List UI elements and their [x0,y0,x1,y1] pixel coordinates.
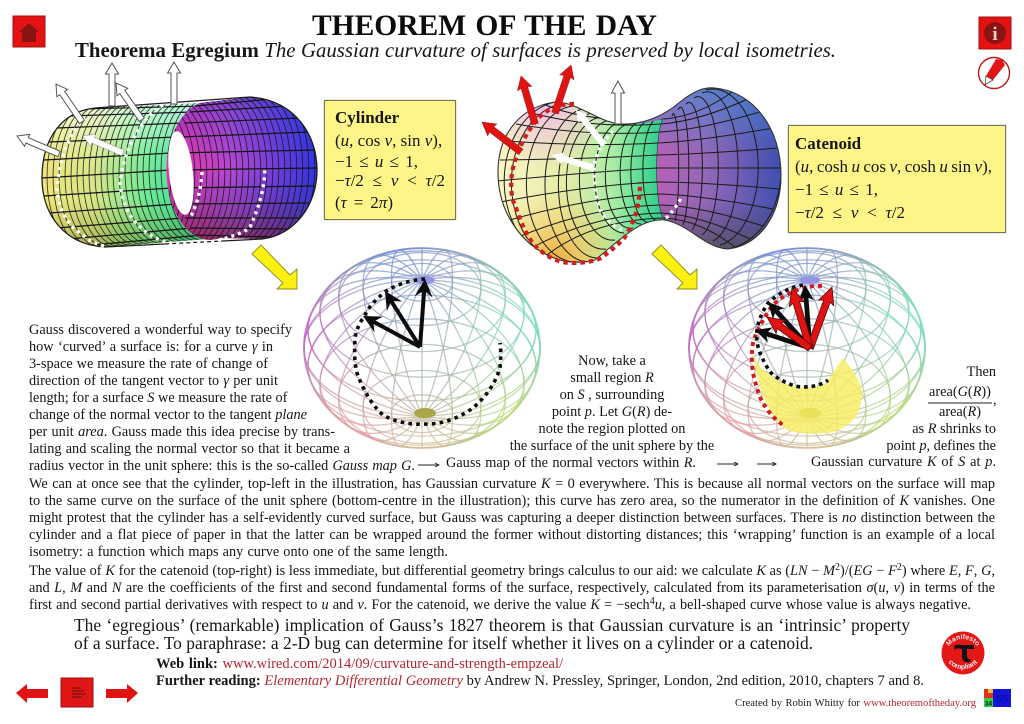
text block: Gauss curvature introduction: direction of the tangent vector to γ per unit [29,372,278,388]
red dotted curve on catenoid [511,104,640,263]
panel: cylinder definition: −1 ≤ u ≤ 1, [335,152,418,171]
text block: web link and further reading: Further reading: Elementary Differential Geometry by Andrew N. Pressley, Springer, London, 2nd edition, 2010, chapters 7 and 8. [156,673,924,689]
text block: cylinder explanation: cylinder and a flat piece of paper in that the latter can be wrapped around the former without distorting distances; this ‘wrapping’ function is an example of a local [29,526,995,542]
text block: small region R: Now, take a [578,353,646,369]
yellow region on sphere [752,350,862,434]
catenoid silhouette outline [498,88,781,262]
text block: implication of the theorem: The ‘egregious’ (remarkable) implication of Gauss’s 1827 theorem is that Gaussian curvature is an ‘intrinsic’ property [74,614,910,634]
cylinder silhouette outline [42,97,317,247]
icon: information button [979,17,1011,49]
black radius vectors on sphere [359,278,434,355]
panel: catenoid definition: (u, cosh u cos v, cosh u sin v), [795,157,992,176]
text block: implication of the theorem [74,614,910,653]
text block: cylinder explanation [29,476,995,560]
text block: Gauss curvature introduction: how ‘curved’ a surface is: for a curve γ in [29,338,273,354]
badge: Manifesto compliant tau: compliant [949,660,978,671]
text block: catenoid explanation: The value of K for the catenoid (top-right) is less immediate, but differential geometry brings calculus to our aid: we calculate K as (LN − M2)/(EG − F2) where E, F, G, [29,562,995,578]
panel: cylinder definition: (u, cos v, sin v), [335,131,442,150]
text block: catenoid explanation [29,562,995,612]
white dotted curves on catenoid [594,131,682,230]
badge: theorem number blocks: 55 [996,694,1008,705]
panel: catenoid definition: Catenoid [795,134,861,153]
badge: theorem number blocks [984,689,1011,708]
text block: Gauss curvature introduction: length; for a surface S we measure the rate of [29,390,287,406]
black radius vectors on second sphere [753,284,818,356]
badge: theorem number blocks: 34 [985,700,992,708]
text block: implication of the theorem: of a surface. To paraphrase: a 2-D bug can determine for itself whether it lives on a cylinder or a catenoid. [74,632,813,652]
text block: cylinder explanation: to the same curve on the surface of the unit sphere (bottom-centre in the illustration); this curve has zero area, so the numerator in the definition of K vanishes. One [29,492,995,508]
fraction bar [928,402,992,404]
red radius vectors on second sphere [762,284,840,354]
icon: pencil in circle [978,58,1010,88]
credit line: Created by Robin Whitty for www.theoremoftheday.org [735,698,976,709]
text block: Gauss curvature introduction: lating and scaling the normal vector so that it became a [29,440,350,456]
text block: curvature definition [811,364,997,470]
text block: Gauss curvature introduction: per unit area. Gauss made this idea precise by trans- [29,424,335,440]
text block: small region R: point p. Let G(R) de- [552,404,672,420]
text block: Gauss curvature introduction: Gauss discovered a wonderful way to specify [29,322,292,338]
panel: cylinder definition [324,100,456,220]
text block: small region R: on S , surrounding [560,387,664,403]
text block: curvature definition: area(G(R)) [929,384,991,400]
text block: small region R: the surface of the unit sphere by the [510,438,714,454]
white normal vector arrows on cylinder [14,62,181,160]
text block: cylinder explanation: might protest that the cylinder has a self-evidently curved surface, but Gauss was capturing a deeper distinction between surfaces. There is no distinction between the [29,510,995,526]
cylinder inner surface [166,98,316,240]
black dotted curve on second sphere [757,285,828,387]
text block: catenoid explanation: first and second partial derivatives with respect to u and v. For the catenoid, we derive the value K = −sech4u, a bell-shaped curve whose value is always negative. [29,596,971,612]
text block: web link and further reading [156,656,924,689]
black dotted curve on sphere [355,279,501,424]
title: THEOREM OF THE DAY [312,10,657,42]
text block: curvature definition: point p, defines the [886,438,996,454]
catenoid interior surface [634,88,780,248]
yellow arrow to first sphere [252,245,297,289]
unit sphere: Gauss map of catenoid [675,235,940,460]
inline arrows between text passages [418,462,776,467]
panel: cylinder definition: Cylinder [335,108,399,127]
text block: curvature definition: area(R) [939,404,981,420]
text block: small region R: small region R [570,370,654,386]
text block: Gauss curvature introduction [29,322,415,474]
button: previous theorem arrow [16,684,48,703]
illustration: catenoid surface with normal vectors [477,63,781,263]
panel: cylinder definition: (τ = 2π) [335,193,393,212]
text block: curvature definition: Gaussian curvature K of S at p. [811,454,996,470]
text block: cylinder explanation: isometry: a function which maps any curve onto one of the same length. [29,544,448,560]
button: next theorem arrow [106,684,138,703]
text block: catenoid explanation: and L, M and N are the coefficients of the first and second fundamental forms of the surface, respectively, calculated from its parameterisation σ(u, v) in terms of the [29,580,995,596]
subtitle: theorem statement: Theorema Egregium The Gaussian curvature of surfaces is preserved by local isometries. [75,39,836,62]
yellow arrow to second sphere [652,245,697,289]
cylinder hole [165,130,197,216]
text block: curvature definition: as R shrinks to [912,421,996,437]
text block: Gauss curvature introduction: radius vector in the unit sphere: this is the so-called Gauss map G. [29,458,415,474]
white normal vector arrows on catenoid [550,81,624,174]
panel: cylinder definition: −τ/2 ≤ v < τ/2 [335,171,445,190]
badge: Manifesto compliant tau [942,632,984,674]
catenoid outer surface [498,102,668,262]
red dotted curve on sphere [752,286,822,425]
text block: cylinder explanation: We can at once see that the cylinder, top-left in the illustration, has Gaussian curvature K = 0 everywhere. This is because all normal vectors on the surface will map [29,476,995,492]
text block: small region R: Gauss map of the normal vectors within R. [446,455,696,471]
panel: catenoid definition: −τ/2 ≤ v < τ/2 [795,203,905,222]
icon: information button: i [992,24,998,45]
badge: Manifesto compliant tau: Manifesto [946,634,979,646]
text block: curvature definition: Then [967,364,996,380]
text block: small region R [446,353,714,471]
unit sphere: Gauss map of cylinder [290,235,555,460]
panel: catenoid definition [788,125,1006,233]
red normal vector arrows [477,63,578,158]
text block: Gauss curvature introduction: 3-space we measure the rate of change of [29,356,268,372]
text block: Gauss curvature introduction: change of the normal vector to the tangent plane [29,406,307,422]
cylinder outer surface [42,103,220,246]
text block: web link and further reading: Web link: www.wired.com/2014/09/curvature-and-strength-empzeal/ [156,656,563,672]
text block: curvature definition: , [993,392,997,408]
text block: small region R: note the region plotted on [539,421,685,437]
white dotted curves on cylinder [57,105,265,246]
icon: home button [13,16,45,47]
panel: catenoid definition: −1 ≤ u ≤ 1, [795,180,878,199]
illustration: cylinder surface with normal vectors [14,62,327,249]
button: contents list [61,678,93,707]
